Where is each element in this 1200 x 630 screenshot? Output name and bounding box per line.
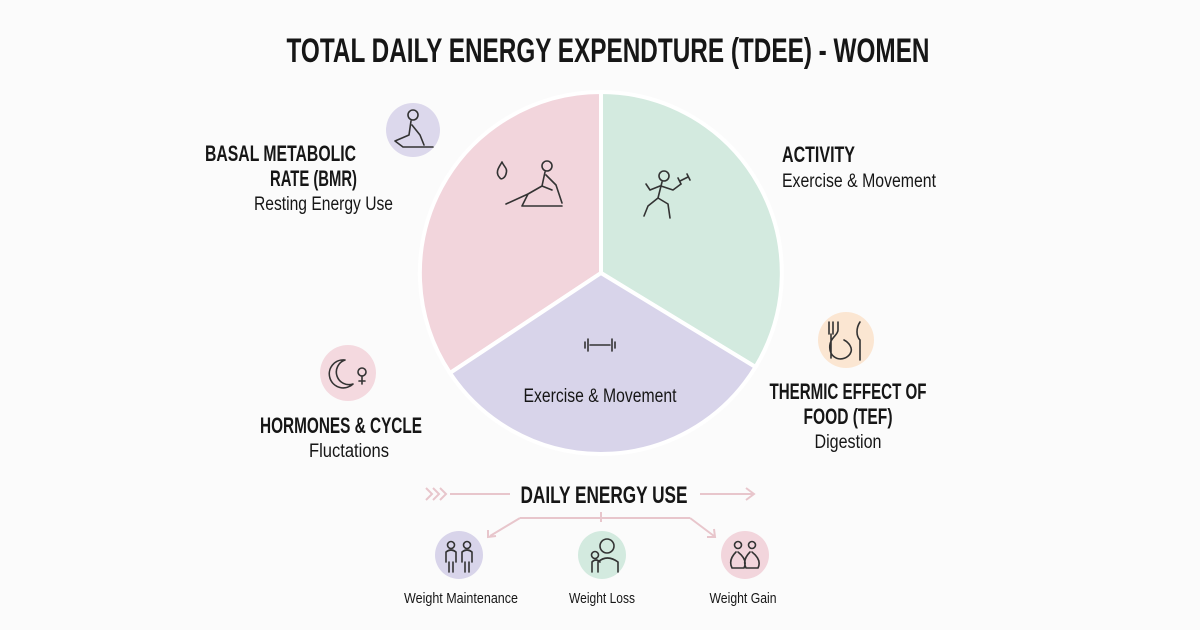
outcome: weight loss [569, 531, 635, 607]
icon: dumbbell [585, 339, 615, 351]
label: BMR: BASAL METABOLIC [205, 141, 356, 166]
label: TEF: FOOD (TEF) [804, 404, 892, 429]
text: exercise & movement: Exercise & Movement [524, 386, 677, 407]
label: hormones: Fluctations [309, 441, 389, 462]
title: TOTAL DAILY ENERGY EXPENDTURE (TDEE) - WOMEN [286, 32, 930, 70]
icon: moon and female symbol [320, 345, 376, 401]
daily energy use heading with arrows: DAILY ENERGY USE [520, 482, 688, 509]
label: BMR: RATE (BMR) [270, 166, 357, 191]
outcome: weight gain [710, 531, 776, 607]
outcome: weight maintenance [404, 531, 518, 607]
label: BMR [205, 141, 393, 215]
label: activity: ACTIVITY [782, 142, 855, 167]
branching arrows [488, 512, 715, 537]
outcome: weight maintenance: Weight Maintenance [404, 590, 518, 607]
label: hormones: HORMONES & CYCLE [260, 413, 422, 438]
label: BMR: Resting Energy Use [254, 194, 393, 215]
label: activity [782, 142, 937, 192]
segment: BMR [420, 92, 601, 373]
label: TEF: Digestion [814, 432, 882, 453]
segment: activity [601, 92, 782, 367]
segment: exercise [450, 273, 756, 454]
icon: TEF stomach and cutlery [818, 312, 874, 368]
icon: runner with dumbbell [644, 171, 690, 218]
outcome: weight loss: Weight Loss [569, 590, 635, 607]
label: TEF: THERMIC EFFECT OF [770, 379, 926, 404]
label: hormones [260, 413, 422, 462]
pie chart [420, 92, 782, 454]
label: activity: Exercise & Movement [782, 171, 937, 192]
outcome: weight gain: Weight Gain [710, 590, 776, 607]
label: TEF [770, 379, 926, 453]
icon: resting woman with flame [497, 161, 562, 206]
icon: BMR woman [386, 103, 440, 157]
